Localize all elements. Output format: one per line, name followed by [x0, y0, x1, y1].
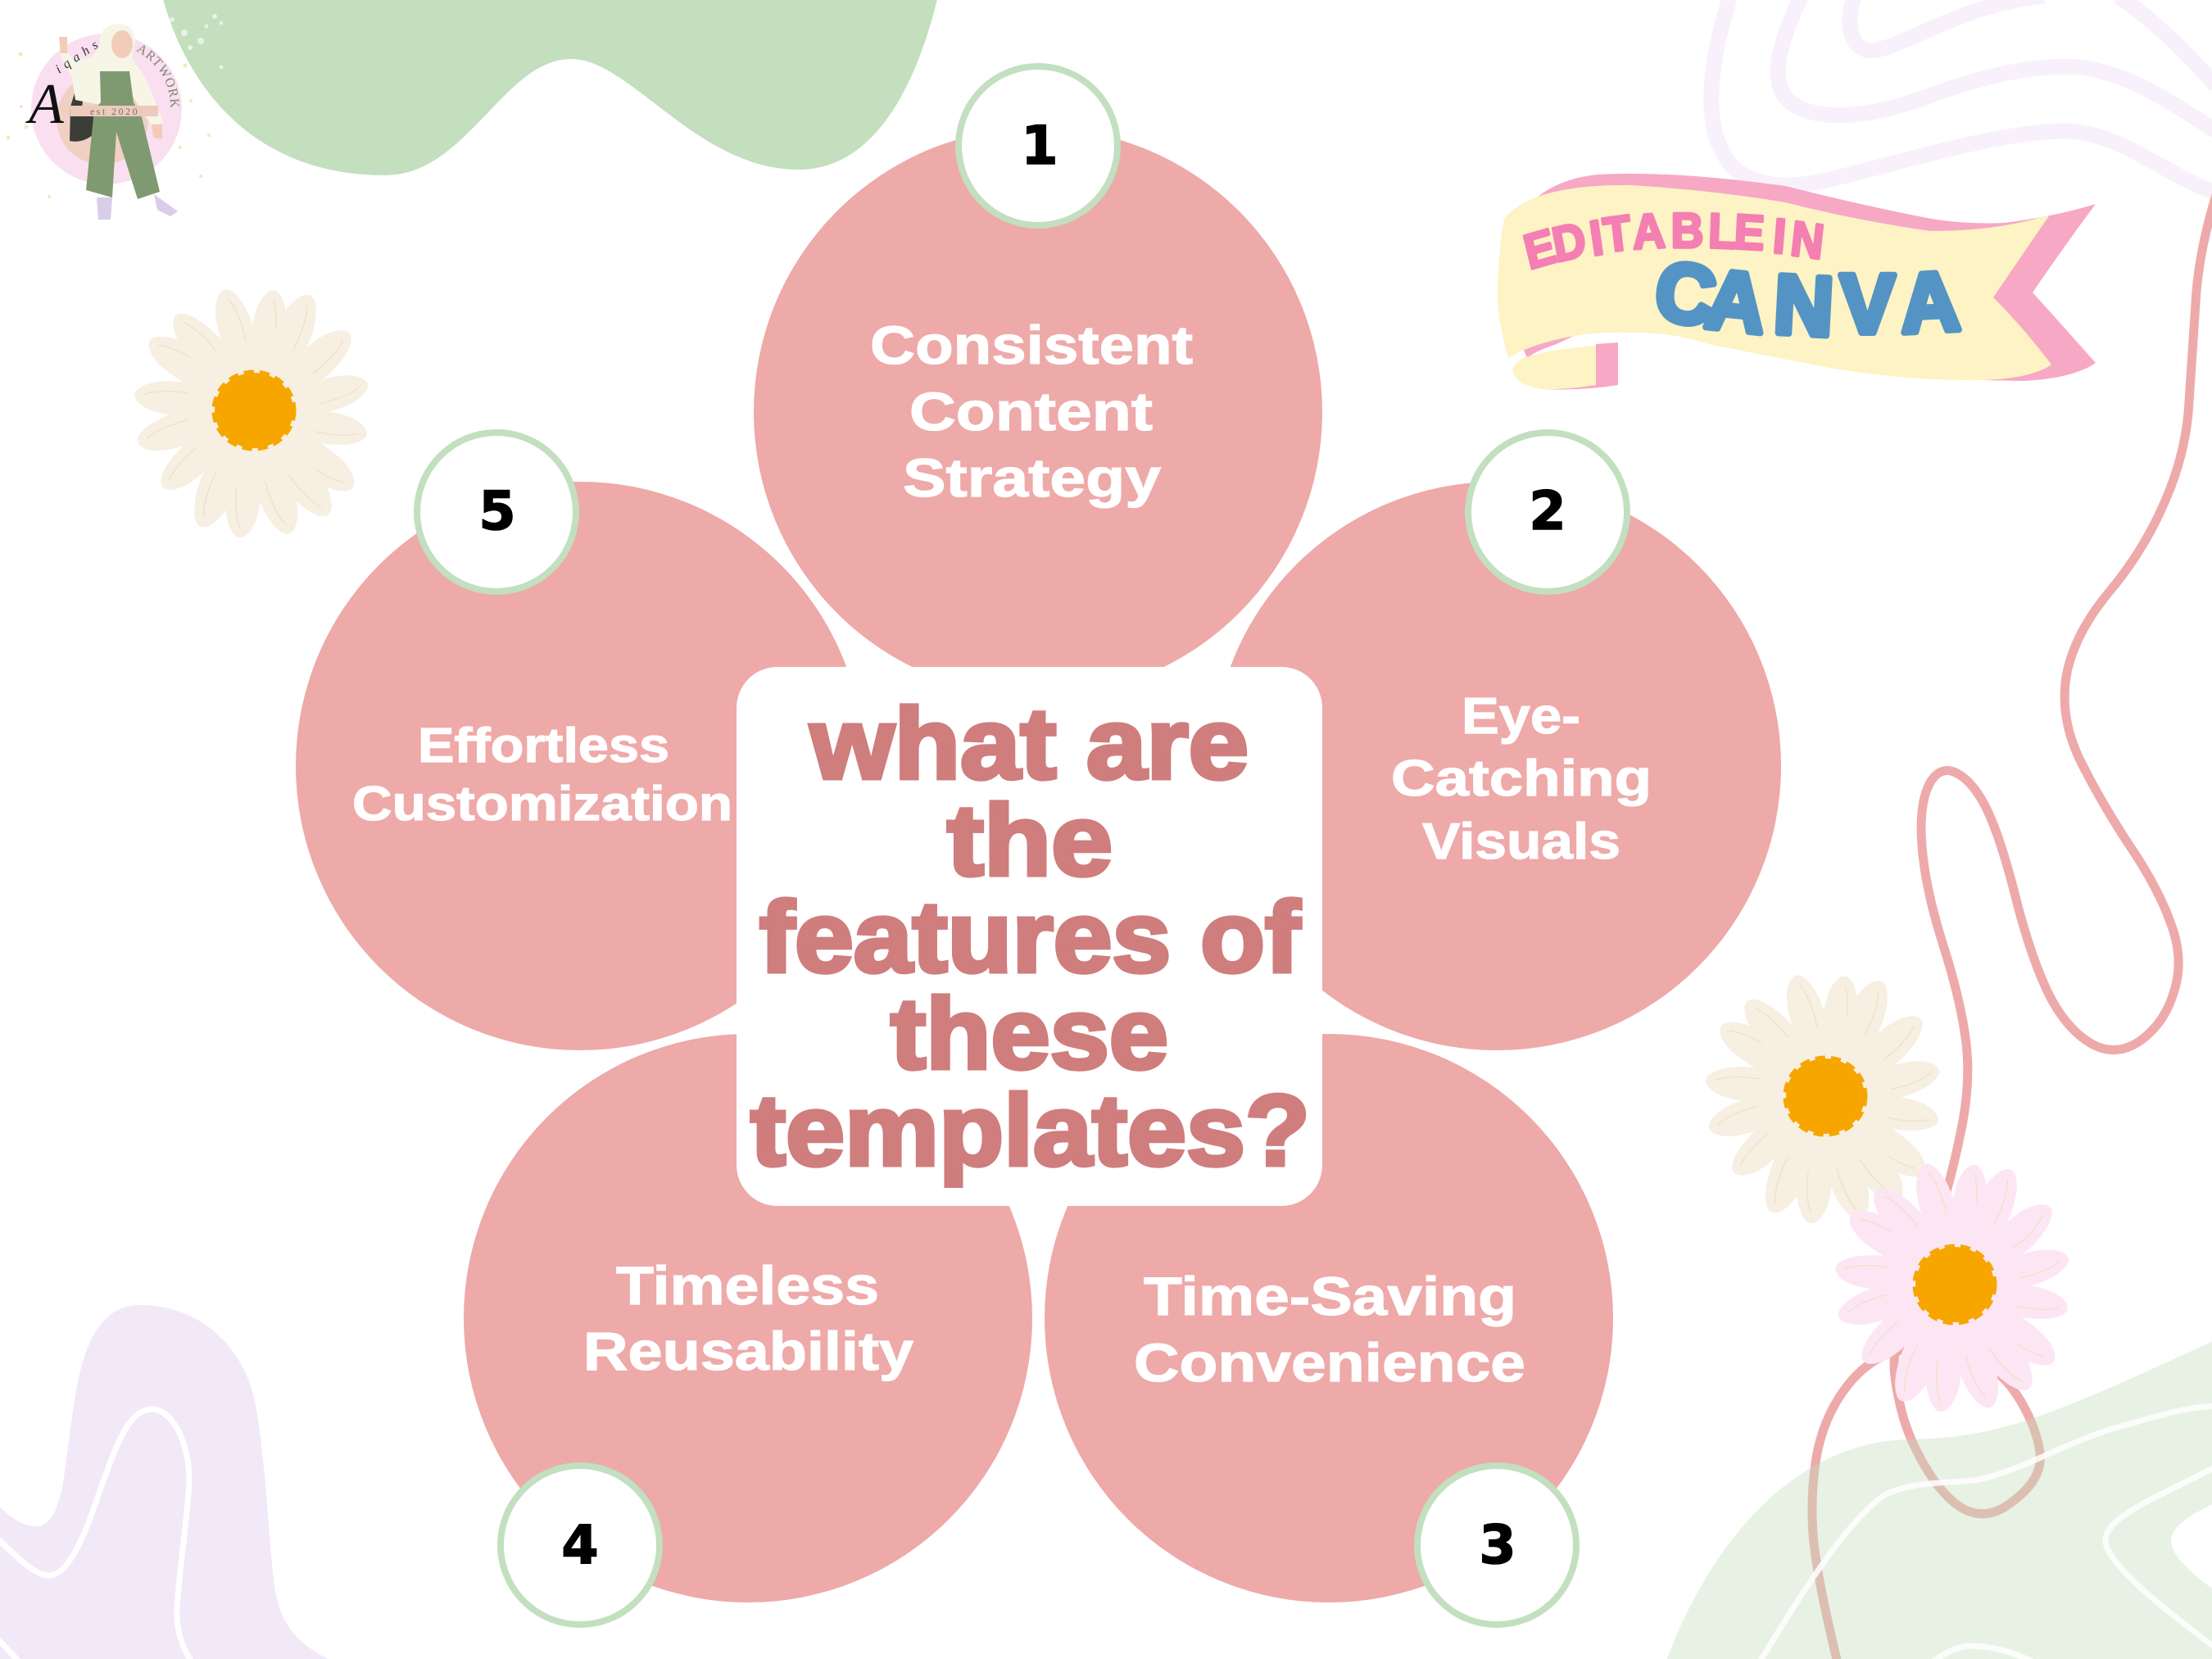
title: these: [891, 978, 1168, 1090]
number badge 1: [959, 66, 1117, 225]
title: features of: [759, 882, 1301, 994]
feature 5 label: Effortless: [418, 718, 669, 773]
feature 4 label: Reusability: [583, 1321, 913, 1381]
background: lilac blob bottom left: [0, 1305, 336, 1659]
banner back ribbon: [1538, 174, 2096, 381]
number badge 2: 2: [1529, 481, 1566, 542]
banner front ribbon: [1498, 185, 2051, 380]
feature 3 label: [1134, 1266, 1525, 1393]
banner curl: [1512, 346, 1596, 389]
logo: Aiqahs Artwork: [7, 24, 211, 220]
number badge 3: [1417, 1466, 1576, 1625]
title: templates?: [750, 1075, 1310, 1187]
feature 2 label: Visuals: [1422, 814, 1620, 870]
feature 1 label: Consistent: [870, 315, 1193, 375]
panel: feature 3: [1045, 1034, 1613, 1602]
center title card: [737, 667, 1322, 1206]
number badge 1: 1: [1021, 116, 1058, 177]
feature 4 label: Timeless: [616, 1255, 879, 1316]
feature 1 label: Strategy: [903, 447, 1161, 508]
feature 1 label: [870, 315, 1193, 508]
feature 3 label: Convenience: [1134, 1332, 1525, 1393]
title: the: [947, 785, 1113, 897]
number badge 4: 4: [561, 1515, 599, 1576]
title: what are: [809, 688, 1249, 800]
panel: feature 5: [296, 482, 864, 1050]
logo confetti: [7, 52, 211, 198]
banner: Editable in Canva: [1498, 174, 2096, 389]
banner text: editable in: EDITABLE IN: [1519, 204, 1827, 280]
flower: cream top left: [133, 285, 372, 540]
panel: feature 4: [464, 1034, 1032, 1602]
title: [750, 688, 1310, 1187]
squiggly pink line: [1812, 195, 2212, 1659]
panel: feature 2: [1213, 482, 1781, 1050]
feature 2 label: Catching: [1391, 750, 1652, 807]
feature 2 label: [1391, 688, 1652, 870]
number badge 4: [501, 1466, 660, 1625]
logo: Aiqahs Artwork: ARTWORK: [136, 45, 179, 108]
feature 5 label: Customization: [352, 777, 732, 831]
background: green blob top: [162, 0, 938, 175]
logo band: [70, 106, 158, 116]
background: lilac wave top right: [1711, 0, 2212, 193]
logo: Aiqahs Artwork: est 2020: [90, 106, 139, 117]
background: green blob bottom right: [1666, 1339, 2212, 1659]
feature 4 label: [583, 1255, 913, 1381]
number badge 2: [1468, 433, 1627, 592]
logo pink circle: [31, 34, 182, 184]
logo figure: [59, 24, 178, 220]
number badge 5: [417, 433, 576, 592]
flower: cream right: [1704, 971, 1943, 1226]
flower: pink right: [1834, 1159, 2073, 1414]
number badge 3: 3: [1479, 1515, 1516, 1576]
logo lettering: [136, 51, 170, 113]
banner text: canva: CANVA: [1650, 244, 1962, 354]
feature 2 label: Eye-: [1462, 688, 1580, 745]
feature 1 label: Content: [909, 381, 1153, 442]
number badge 5: 5: [478, 481, 516, 542]
feature 5 label: [352, 718, 732, 831]
logo: Aiqahs Artwork: A: [25, 73, 64, 136]
feature 3 label: Time-Saving: [1144, 1266, 1516, 1326]
logo: Aiqahs Artwork: iqahs: [53, 35, 105, 76]
panel: feature 1: [754, 128, 1322, 696]
sparkle flecks on green blob: [170, 14, 223, 69]
